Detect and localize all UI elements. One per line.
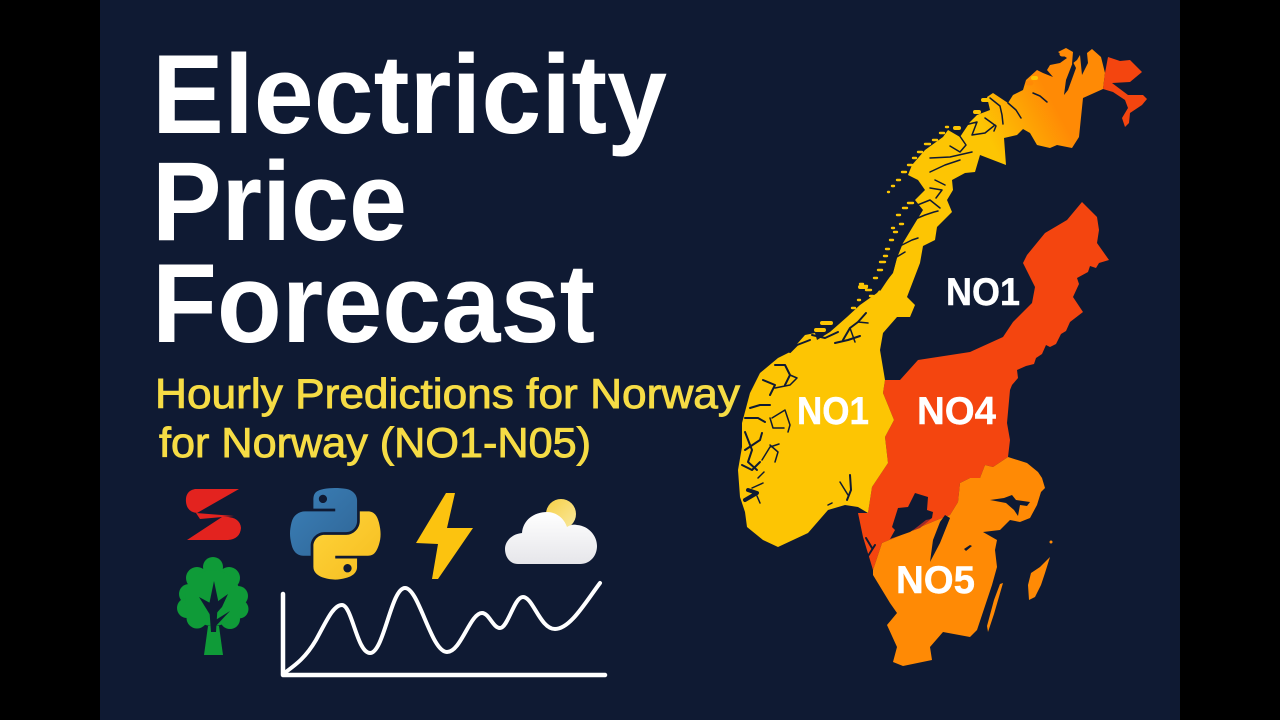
lake Vättern <box>930 515 950 562</box>
Norwegian fjord inlets <box>1064 62 1076 95</box>
region: NO4 red <box>858 202 1109 570</box>
Stockholm inlet <box>990 495 1030 516</box>
icon: cloud with sun <box>505 499 597 564</box>
small lake <box>964 545 972 551</box>
icon: python logo <box>290 488 381 580</box>
title: Electricity <box>152 32 667 157</box>
region labels: NO1 <box>797 390 869 433</box>
title <box>152 32 667 366</box>
region labels <box>797 271 1020 602</box>
icon: red S logo <box>186 489 241 540</box>
region: NO1 Norway yellow <box>738 48 1105 547</box>
region: Finnmark east red <box>1103 57 1147 127</box>
region labels: NO5 <box>896 559 975 602</box>
title: Price <box>152 139 407 264</box>
icon: green tree <box>177 557 248 655</box>
lake Vänern <box>890 493 933 539</box>
map of regions <box>738 48 1147 666</box>
subtitle: Hourly Predictions for Norway <box>155 370 740 417</box>
island: Gotland <box>1028 557 1050 600</box>
subtitle <box>155 370 740 466</box>
fjords <box>742 93 1047 556</box>
island: small islet <box>1050 540 1052 544</box>
island: Öland <box>987 583 1003 632</box>
title: Forecast <box>152 241 595 366</box>
subtitle: for Norway (NO1-N05) <box>159 419 591 466</box>
region labels: NO4 <box>917 390 996 433</box>
lake glow <box>912 519 931 531</box>
coastal islands <box>816 54 1067 330</box>
region labels: NO1 <box>946 271 1020 314</box>
region: NO5 orange <box>873 457 1045 666</box>
icon: lightning bolt <box>416 493 473 579</box>
line chart <box>283 583 605 675</box>
